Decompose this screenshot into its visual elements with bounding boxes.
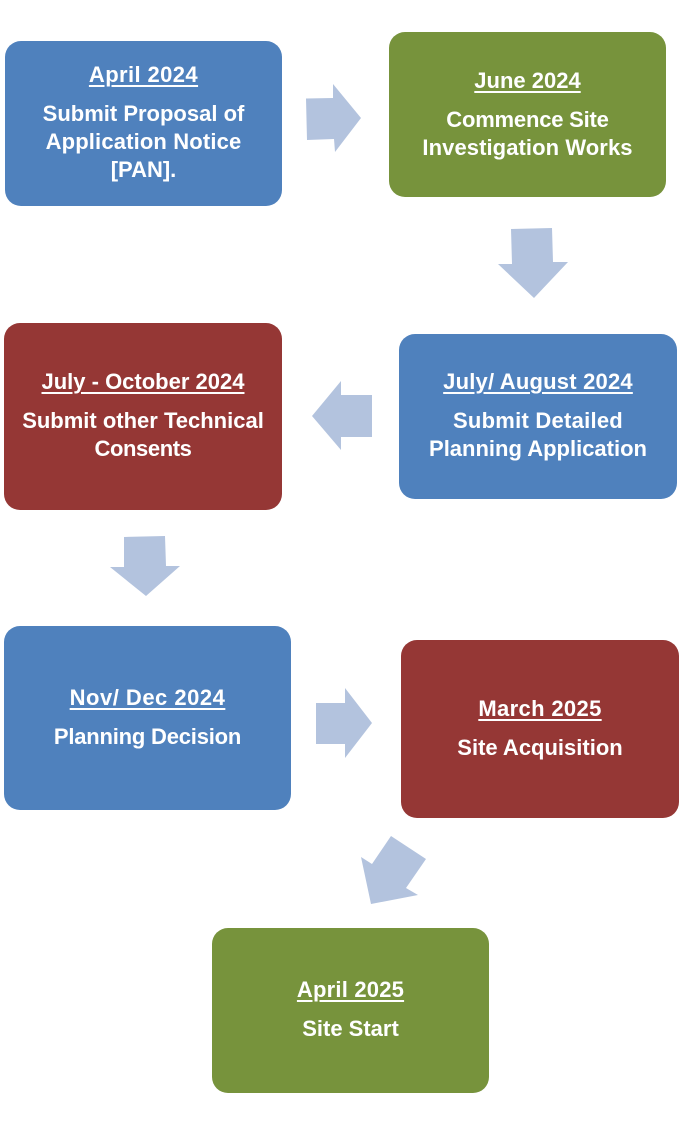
- arrow: Nov/Dec to March: [316, 688, 372, 758]
- description: Planning Application: [429, 436, 647, 461]
- panel: June 2024: [389, 32, 666, 197]
- panel: March 2025: [401, 640, 679, 818]
- description: Planning Decision: [54, 724, 241, 749]
- description: Investigation Works: [422, 135, 633, 160]
- panel: July-October 2024: [4, 323, 282, 510]
- description: Commence Site: [446, 107, 609, 132]
- description: Submit Proposal of: [43, 101, 244, 126]
- panel: July/August 2024: [399, 334, 677, 499]
- panel: Nov/Dec 2024: [4, 626, 291, 810]
- arrow: March to April 2025: [361, 836, 426, 904]
- description: Submit Detailed: [453, 408, 623, 433]
- description: [429, 408, 647, 461]
- description: [22, 408, 264, 461]
- description: Submit other Technical: [22, 408, 264, 433]
- date: July/ August 2024: [443, 369, 633, 394]
- date: June 2024: [474, 68, 581, 93]
- arrow: June to July/August: [498, 228, 568, 298]
- description: [PAN].: [111, 157, 176, 182]
- panel: April 2025: [212, 928, 489, 1093]
- description: Site Acquisition: [457, 735, 623, 760]
- arrow: July-October to Nov/Dec: [110, 536, 180, 596]
- date: March 2025: [478, 696, 602, 721]
- arrow: April to June: [306, 84, 361, 152]
- description: Consents: [94, 436, 192, 461]
- date: July - October 2024: [42, 369, 244, 394]
- date: Nov/ Dec 2024: [70, 685, 225, 710]
- description: [422, 107, 633, 160]
- description: [43, 101, 244, 182]
- panel: April 2024: [5, 41, 282, 206]
- description: Application Notice: [46, 129, 241, 154]
- date: April 2025: [297, 977, 404, 1002]
- date: April 2024: [89, 62, 198, 87]
- description: Site Start: [302, 1016, 399, 1041]
- arrow: July/August to July-October: [312, 381, 372, 450]
